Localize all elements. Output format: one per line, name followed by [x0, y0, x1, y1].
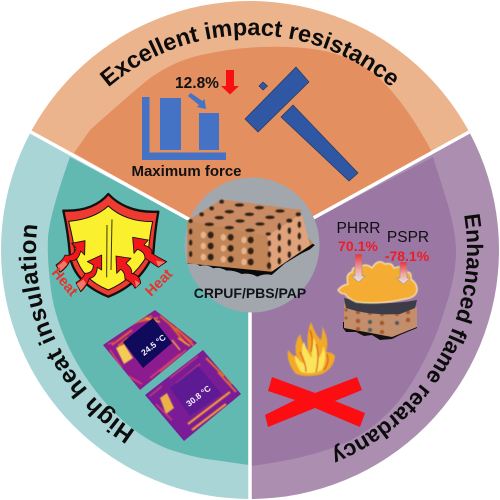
label: Heat left: Heat	[48, 265, 81, 300]
icon: flame	[288, 322, 335, 376]
temperature label: 30.8 °C	[184, 383, 213, 409]
value: PHRR 70.1%: 70.1%	[338, 238, 378, 254]
label: PSPR: PSPR	[387, 229, 429, 246]
label: CRPUF/PBS/PAP: CRPUF/PBS/PAP	[194, 285, 306, 301]
label: PHRR: PHRR	[337, 220, 380, 237]
arrow PHRR	[352, 254, 366, 282]
burning foam block	[338, 254, 417, 340]
icon: red cross	[265, 377, 365, 427]
heading: Excellent impact resistance: Excellent impact resistance	[99, 21, 397, 86]
icon: hammer	[245, 67, 358, 181]
bar chart: maximum force	[142, 75, 226, 160]
flames	[338, 262, 417, 303]
icon: shield with heat arrows	[56, 194, 167, 297]
foam block illustration	[187, 199, 315, 277]
icon: red down arrow	[221, 70, 239, 94]
arrow PSPR	[396, 262, 410, 284]
base block	[343, 298, 417, 340]
label: Maximum force: Maximum force	[131, 163, 242, 180]
heading: High heat insulation: High heat insulation	[18, 225, 134, 444]
value: PSPR -78.1%: -78.1%	[385, 248, 430, 264]
thermal image: 30.8 °C	[145, 350, 241, 441]
thermal image: 24.5 °C	[103, 310, 197, 390]
temperature label: 24.5 °C	[139, 332, 168, 358]
label: Heat right: Heat	[143, 266, 176, 300]
percentage label: 12.8%	[175, 75, 219, 92]
central circle: foam	[184, 178, 320, 312]
heading: Enhanced flame retardancy: Enhanced flame retardancy	[334, 214, 484, 463]
